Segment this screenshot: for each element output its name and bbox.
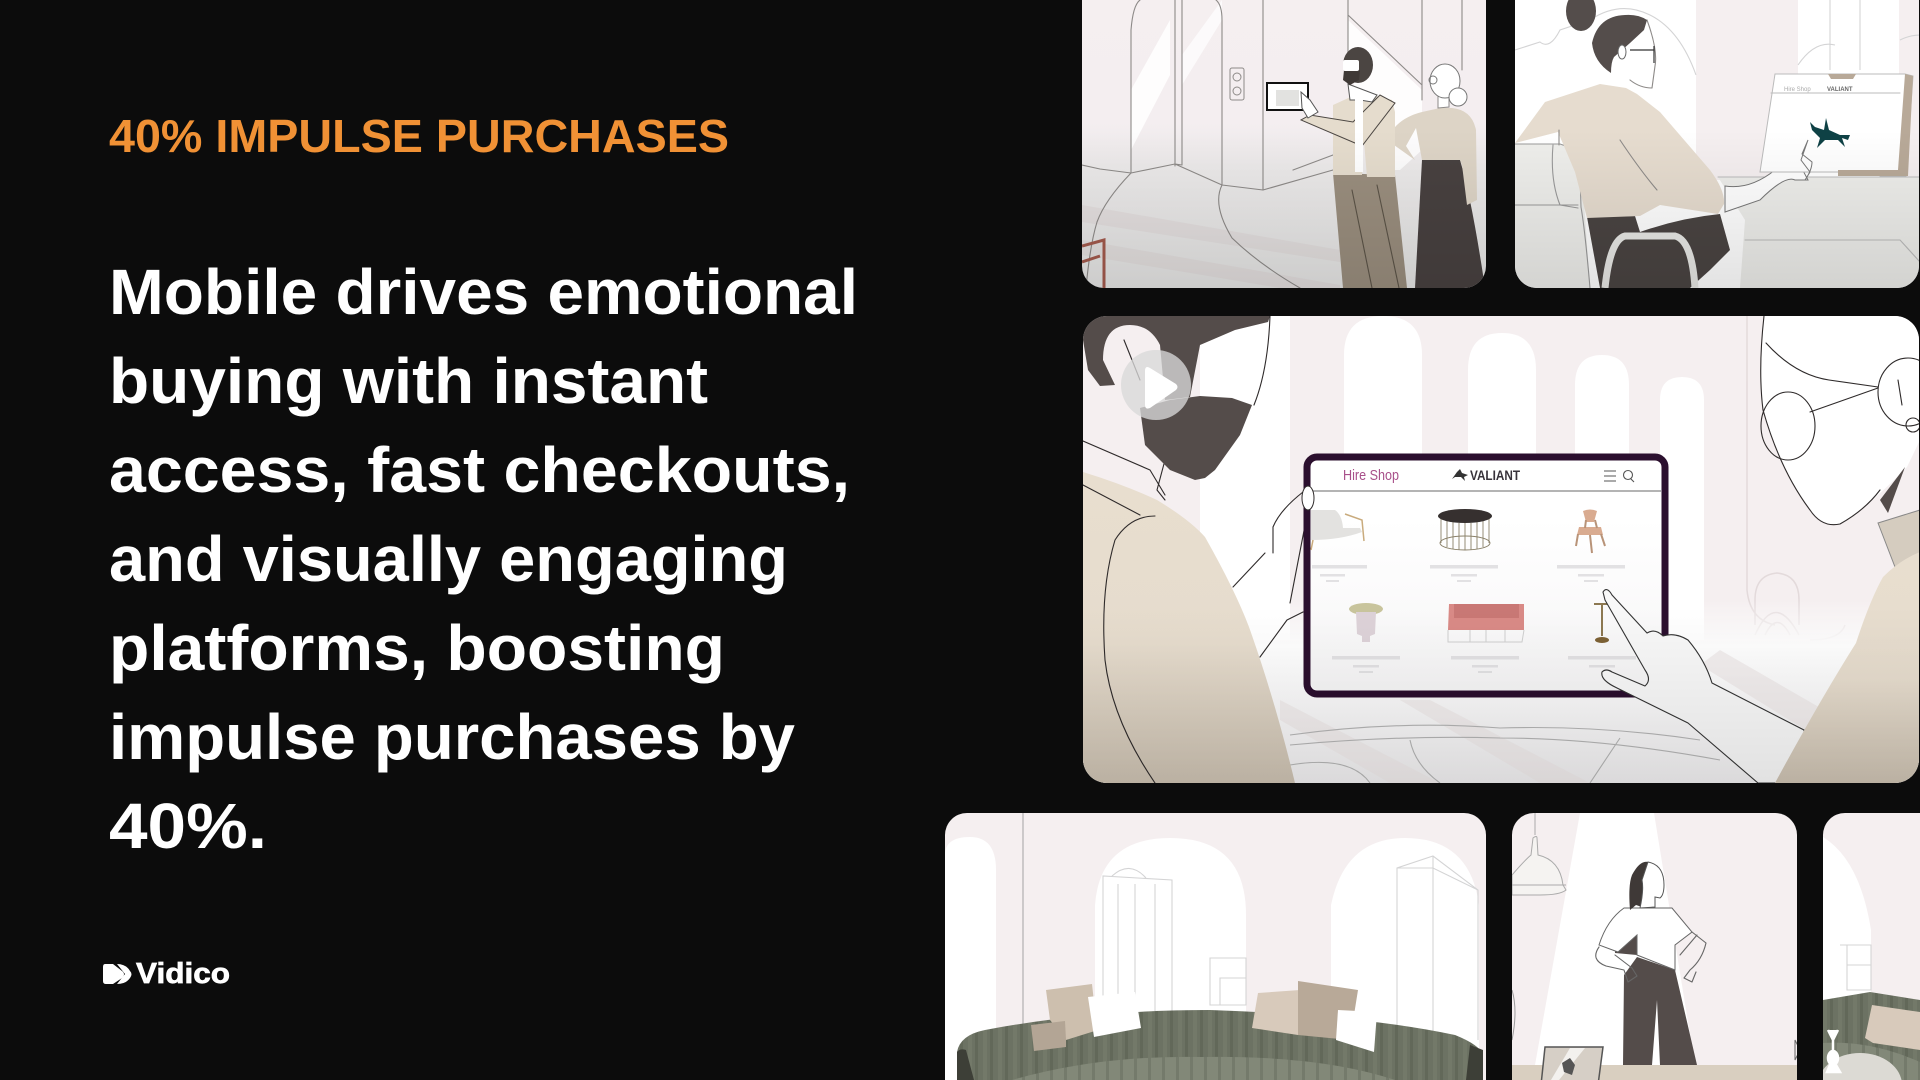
panel: woman using tablet on sofa bbox=[1515, 0, 1920, 288]
logo: Vidico bbox=[103, 958, 230, 990]
product: pink chair bbox=[1576, 510, 1605, 553]
body text bbox=[109, 256, 858, 862]
figurine bbox=[1827, 1030, 1840, 1072]
wall stripes and arches bbox=[1082, 0, 1462, 190]
man bbox=[1301, 47, 1407, 288]
woman standing bbox=[1596, 862, 1706, 1065]
panel: woman under lamp bbox=[1512, 813, 1800, 1080]
arm and hand bbox=[1724, 172, 1809, 213]
product: pink sofa bbox=[1448, 604, 1524, 642]
red chair bbox=[1082, 240, 1104, 288]
body text: platforms, boosting bbox=[109, 612, 725, 684]
woman bbox=[1389, 64, 1485, 288]
product: side lamp bbox=[1594, 604, 1609, 643]
arched windows bbox=[1200, 316, 1704, 640]
sofa bbox=[957, 1010, 1483, 1080]
small tablet on table bbox=[1541, 1047, 1603, 1080]
panel: couple with tablet in lobby bbox=[1082, 0, 1486, 288]
valiant logo bbox=[1452, 469, 1520, 481]
body text: and visually engaging bbox=[109, 523, 788, 595]
play button bbox=[1121, 350, 1191, 420]
right hand pointing bbox=[1602, 590, 1810, 783]
valiant logo: VALIANT bbox=[1470, 468, 1521, 483]
pillows bbox=[1031, 981, 1377, 1052]
menu and search icons bbox=[1604, 470, 1634, 482]
floor bands bbox=[1082, 205, 1324, 260]
body text: 40%. bbox=[109, 790, 267, 862]
laptop bbox=[1760, 74, 1913, 176]
laptop: VALIANT bbox=[1827, 87, 1853, 93]
product: sofa chair bbox=[1311, 510, 1364, 550]
product: round table bbox=[1438, 509, 1492, 550]
pendant lamp bbox=[1512, 813, 1566, 895]
panel: close-up tablet with shop bbox=[1083, 316, 1920, 783]
room outlines bbox=[1747, 316, 1845, 640]
tablet bbox=[1267, 83, 1318, 118]
floor bbox=[1083, 600, 1920, 783]
woman right bbox=[1761, 316, 1920, 783]
thumbnail nail bbox=[1302, 486, 1314, 510]
light cone bbox=[1535, 813, 1695, 1065]
body text: Mobile drives emotional bbox=[109, 256, 858, 328]
marble table bbox=[1818, 1053, 1902, 1080]
body text: impulse purchases by bbox=[109, 701, 795, 773]
body text: buying with instant bbox=[109, 345, 708, 417]
light switch bbox=[1230, 68, 1244, 100]
floor and table bbox=[1512, 1065, 1797, 1080]
man left bbox=[1083, 316, 1295, 783]
shop tablet bbox=[1307, 457, 1665, 694]
placeholder bars bbox=[1312, 565, 1636, 673]
pillow bbox=[1865, 1005, 1920, 1050]
body text: access, fast checkouts, bbox=[109, 434, 850, 506]
arched windows bbox=[945, 813, 1479, 1080]
left hand bbox=[1233, 492, 1308, 657]
woman bbox=[1515, 0, 1730, 288]
heading: 40% impulse purchases: 40% IMPULSE PURCHASES bbox=[109, 110, 729, 162]
panel: cropped sofa bbox=[1818, 813, 1920, 1080]
laptop: Hire Shop bbox=[1784, 87, 1811, 93]
chair back bbox=[1605, 236, 1695, 288]
panel: living room with green sofa bbox=[945, 813, 1486, 1080]
desk and sofa bbox=[1718, 177, 1920, 288]
logo: Vidico: Vidico bbox=[136, 958, 230, 990]
product: stool bbox=[1349, 603, 1383, 642]
tablet header text: Hire Shop bbox=[1343, 468, 1399, 484]
